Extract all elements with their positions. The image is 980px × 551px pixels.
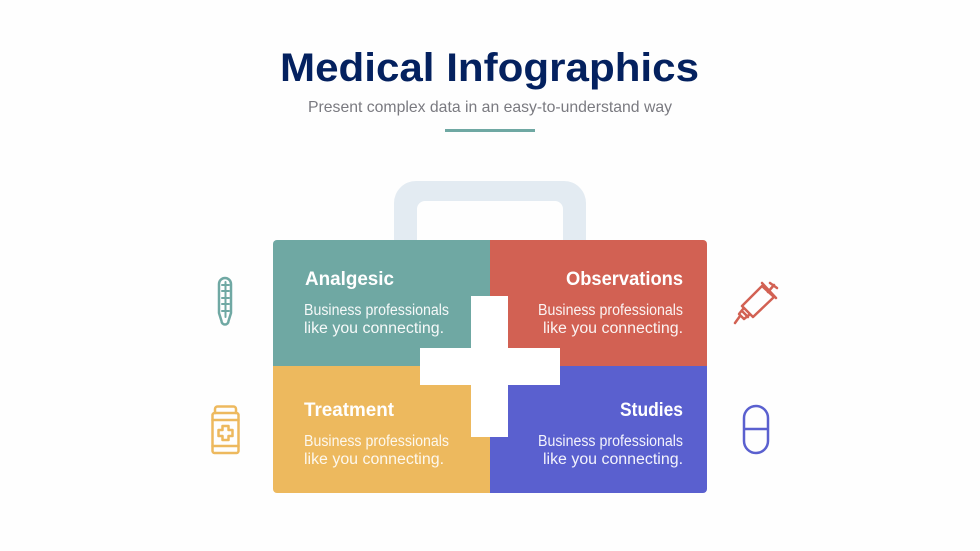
icon: capsule [744, 406, 768, 453]
panel: analgesic [273, 240, 490, 366]
icon: syringe [735, 283, 777, 323]
panel: treatment: like you connecting. [304, 451, 444, 468]
panel: studies [490, 366, 707, 493]
panel: treatment [273, 366, 490, 493]
bag handle [394, 181, 586, 241]
icon: thermometer [219, 278, 231, 324]
panel: analgesic: Business professionals [304, 302, 449, 319]
panel: studies: Business professionals [538, 433, 683, 450]
panel: analgesic: Analgesic [305, 269, 394, 290]
title underline [445, 129, 535, 132]
panel: analgesic: like you connecting. [304, 320, 444, 337]
subtitle: Present complex data in an easy-to-understand way [308, 99, 672, 116]
panel: observations: Observations [566, 269, 683, 290]
icon: medicine bottle [212, 406, 238, 453]
panel: treatment: Treatment [304, 400, 395, 421]
panel: studies: Studies [620, 400, 683, 421]
white medical cross [420, 296, 560, 437]
panel: studies: like you connecting. [543, 451, 683, 468]
panel: observations: like you connecting. [543, 320, 683, 337]
panel: observations: Business professionals [538, 302, 683, 319]
title: Medical Infographics [280, 46, 699, 90]
medical bag infographic [273, 181, 707, 493]
panel: observations [490, 240, 707, 366]
panel: treatment: Business professionals [304, 433, 449, 450]
